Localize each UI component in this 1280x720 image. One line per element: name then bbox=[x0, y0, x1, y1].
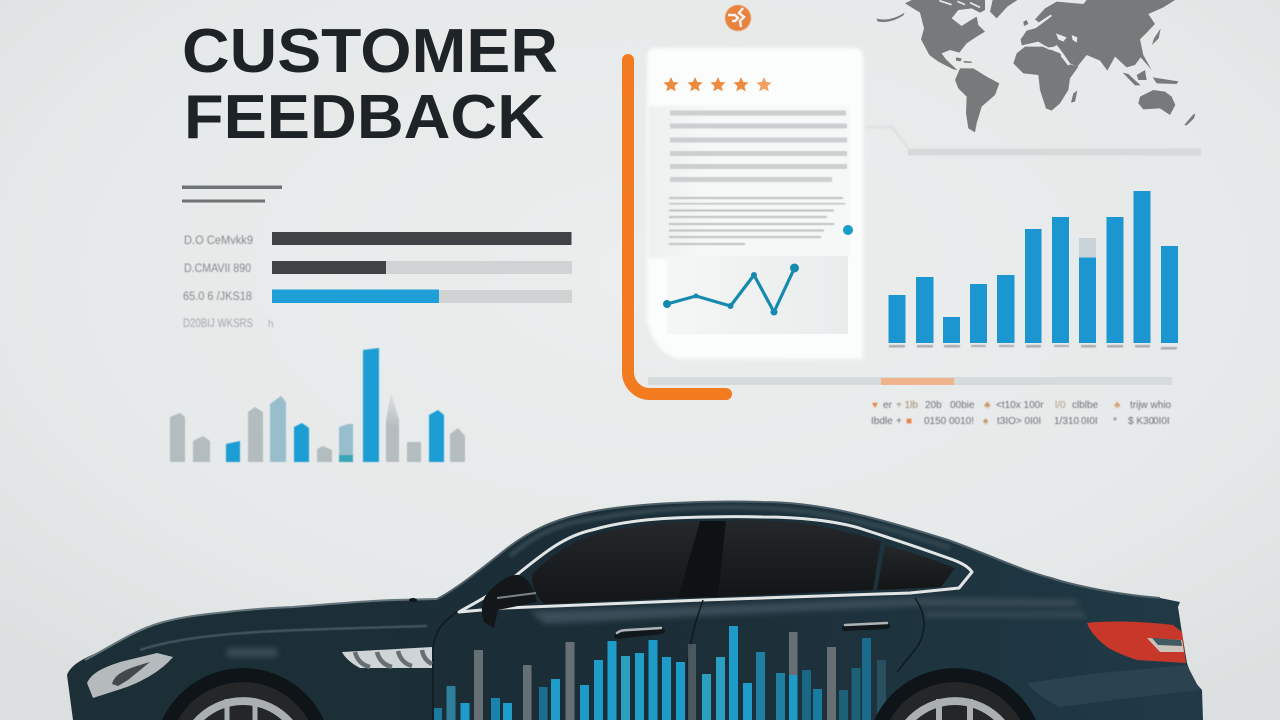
greenland bbox=[990, 0, 1017, 18]
small column chart bbox=[170, 348, 465, 462]
quarter window bbox=[877, 545, 955, 590]
title bbox=[182, 17, 558, 152]
tail light bbox=[1087, 622, 1186, 663]
front window bbox=[532, 521, 700, 604]
madagascar bbox=[1071, 91, 1077, 103]
heavy text lines bbox=[670, 110, 847, 182]
legend row one: + 1lb bbox=[896, 400, 918, 411]
review document bbox=[647, 48, 863, 359]
hood crease bbox=[140, 626, 427, 650]
grey columns bbox=[170, 392, 465, 462]
subtitle rules bbox=[182, 186, 282, 202]
blue marker dot bbox=[843, 225, 853, 235]
row labels: D20BIJ WKSRS bbox=[183, 318, 253, 330]
rear window bbox=[718, 520, 881, 597]
eurasia bbox=[1021, 0, 1175, 71]
legend row one: ♥ bbox=[872, 400, 878, 411]
muted blue columns bbox=[270, 396, 353, 462]
legend text bbox=[871, 400, 1172, 427]
legend row two: ♠ bbox=[983, 416, 989, 427]
africa bbox=[1013, 47, 1078, 111]
legend row one: er bbox=[883, 400, 893, 411]
side vent bbox=[342, 647, 432, 668]
legend row two: 0150 bbox=[924, 416, 947, 427]
timeline bar bbox=[648, 377, 1172, 385]
fender highlight bbox=[227, 648, 277, 657]
mirror bbox=[482, 575, 537, 628]
legend row one: clblbe bbox=[1072, 400, 1099, 411]
legend row two: 0I0I bbox=[1153, 416, 1170, 427]
mirror highlight bbox=[497, 593, 536, 598]
car bbox=[67, 501, 1203, 720]
rear wheel bbox=[874, 668, 1036, 720]
wiper nozzle bbox=[409, 598, 417, 602]
fine text lines bbox=[669, 197, 845, 245]
window chrome bbox=[459, 517, 972, 612]
upper roof band bbox=[510, 507, 950, 556]
axis labels bbox=[889, 345, 1177, 350]
australia bbox=[1138, 90, 1175, 115]
star rating bbox=[663, 77, 772, 91]
car body bbox=[67, 501, 1203, 720]
door handles bbox=[617, 623, 887, 636]
document card bbox=[647, 48, 863, 359]
legend row one: trijw whio bbox=[1130, 400, 1172, 411]
horizontal bar list bbox=[183, 232, 572, 330]
legend row two: * bbox=[1113, 416, 1117, 427]
front wheel bbox=[162, 668, 324, 720]
legend row two: 0010! bbox=[949, 416, 974, 427]
legend row two: Ibdle bbox=[871, 416, 893, 427]
legend row two: ■ bbox=[906, 416, 912, 427]
door seams bbox=[433, 598, 924, 720]
connector line bbox=[866, 127, 1201, 152]
cuba bbox=[956, 57, 972, 63]
indonesia bbox=[1123, 70, 1178, 85]
columns bbox=[888, 191, 1178, 343]
alaska tail bbox=[877, 13, 905, 22]
legend row one: 20b bbox=[925, 400, 942, 411]
legend row two: + bbox=[896, 416, 902, 427]
legend row one: l/0 bbox=[1055, 400, 1066, 411]
orange bracket bbox=[628, 60, 726, 394]
grey bars bbox=[474, 632, 836, 720]
headlight bbox=[87, 653, 173, 698]
legend row two: 0I0I bbox=[1081, 416, 1098, 427]
legend row two bbox=[871, 416, 1170, 427]
seas bbox=[1033, 15, 1077, 65]
hood rim light bbox=[85, 599, 437, 660]
row labels bbox=[183, 235, 274, 330]
uk bbox=[1023, 20, 1028, 26]
column backdrop bbox=[1079, 238, 1096, 258]
world map bbox=[877, 0, 1195, 132]
equalizer chart on door bbox=[434, 626, 886, 720]
north america bbox=[905, 0, 985, 70]
legend row one bbox=[872, 400, 1172, 411]
legend row one: 00bie bbox=[950, 400, 975, 411]
legend row one: ♣ bbox=[984, 400, 991, 411]
icon: orange badge bbox=[725, 5, 751, 31]
legend row two: t3IO> 0I0I bbox=[997, 416, 1041, 427]
line chart bbox=[663, 264, 799, 316]
legend row one: <t10x 100r bbox=[996, 400, 1044, 411]
legend row two: 1/310 bbox=[1054, 416, 1079, 427]
japan bbox=[1152, 28, 1161, 45]
bar fills bbox=[272, 232, 572, 303]
text panel bbox=[648, 106, 850, 258]
row labels: h bbox=[268, 319, 274, 330]
title: FEEDBACK bbox=[184, 83, 544, 152]
row labels: D.CMAVII 890 bbox=[184, 263, 251, 275]
row labels: 65.0 6 /JKS18 bbox=[183, 291, 252, 303]
row labels: D.O CeMvkk9 bbox=[184, 235, 253, 247]
title: CUSTOMER bbox=[182, 17, 558, 86]
shoulder highlights bbox=[530, 598, 1085, 624]
rear bumper panel bbox=[1027, 665, 1200, 707]
new zealand bbox=[1184, 113, 1195, 125]
large column chart bbox=[888, 191, 1178, 350]
roof rim light bbox=[437, 501, 1160, 599]
window glass bbox=[532, 520, 955, 604]
inset chart panel bbox=[667, 256, 848, 334]
pillar bbox=[678, 521, 726, 598]
legend row two: $ K30 bbox=[1128, 416, 1155, 427]
legend row one: ♣ bbox=[1114, 400, 1121, 411]
south america bbox=[955, 68, 999, 132]
blue bars bbox=[434, 626, 886, 720]
arctic slivers bbox=[939, 1, 980, 7]
bar tracks bbox=[272, 261, 572, 303]
timeline highlight bbox=[881, 378, 954, 385]
blue columns bbox=[226, 348, 444, 462]
